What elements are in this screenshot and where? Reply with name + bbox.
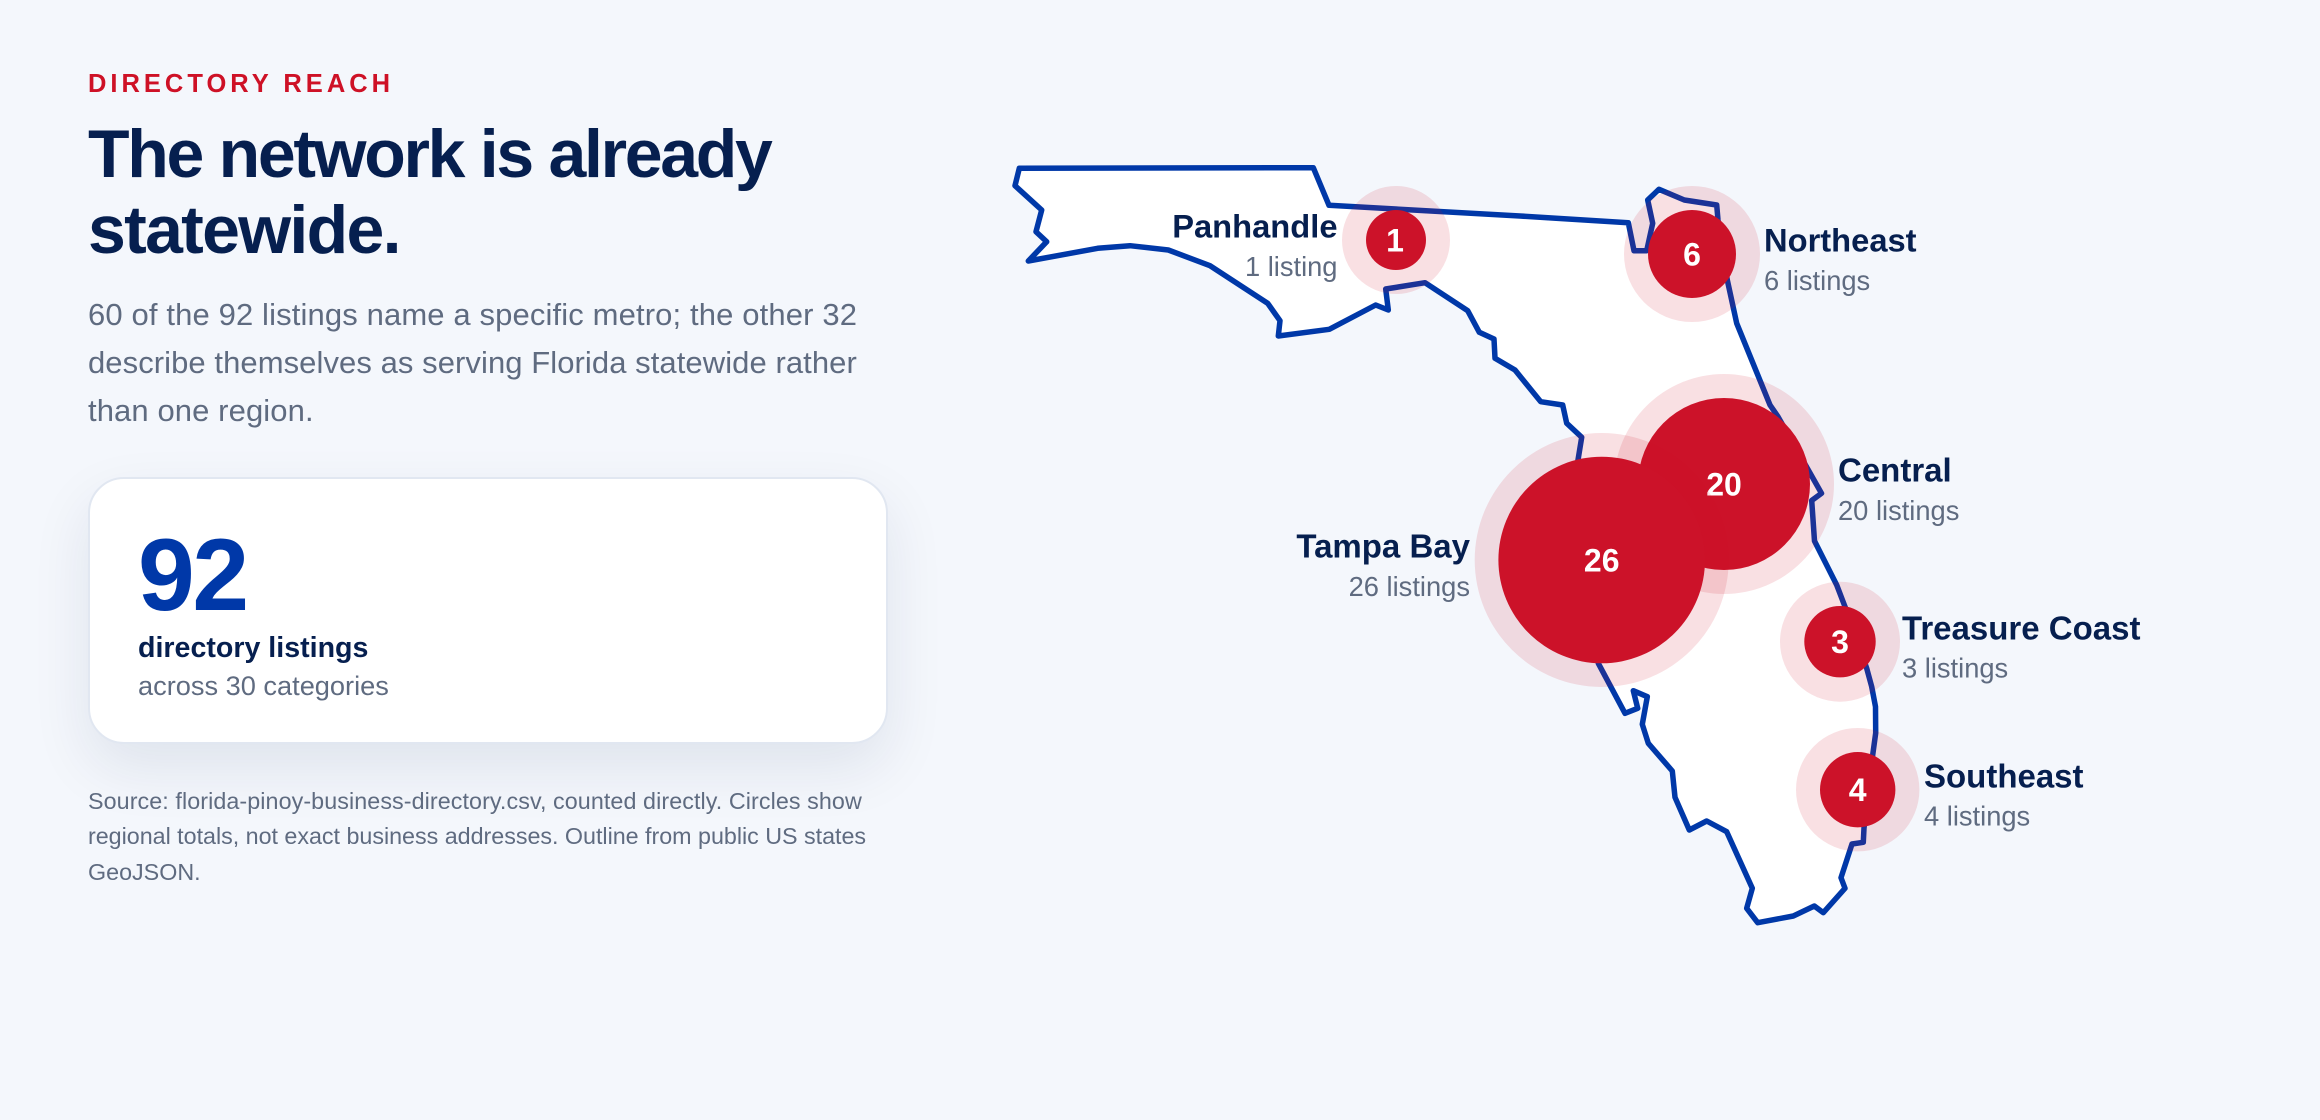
source note: regional totals, not exact business addresses. Outline from public US states — [88, 823, 866, 849]
bubble: Tampa Bay: 26 — [1584, 542, 1619, 578]
source note — [88, 788, 866, 885]
stat label: directory listings — [138, 632, 368, 664]
bubble: Treasure Coast: 3 listings — [1902, 653, 2008, 684]
bubble: Tampa Bay: 26 listings — [1349, 571, 1470, 602]
title: The network is already — [88, 116, 771, 192]
panel: total listings card — [88, 477, 888, 744]
bubble: Southeast: 4 listings — [1924, 801, 2030, 832]
bubble: Treasure Coast — [1780, 582, 2140, 702]
intro paragraph — [88, 296, 857, 428]
title: statewide. — [88, 192, 400, 268]
bubble: Northeast: 6 listings — [1764, 265, 1870, 296]
stat sublabel: across 30 categories — [138, 670, 389, 700]
source note: Source: florida-pinoy-business-directory.csv, counted directly. Circles show — [88, 788, 862, 814]
bubble: Southeast: 4 — [1849, 772, 1867, 808]
bubble: Panhandle: 1 listing — [1245, 251, 1338, 282]
bubble: Tampa Bay — [1296, 433, 1729, 687]
bubble: Panhandle: Panhandle — [1172, 208, 1338, 245]
intro paragraph: 60 of the 92 listings name a specific metro; the other 32 — [88, 296, 857, 332]
bubble: Central: Central — [1838, 452, 1952, 489]
bubble: Central: 20 listings — [1838, 495, 1959, 526]
source note: GeoJSON. — [88, 859, 201, 885]
bubble: Panhandle — [1172, 186, 1450, 294]
intro paragraph: than one region. — [88, 392, 314, 428]
bubble: Treasure Coast: 3 — [1831, 624, 1849, 660]
bubble: Northeast — [1624, 186, 1917, 322]
bubble: Southeast: Southeast — [1924, 757, 2084, 794]
bubble: Central — [1614, 374, 1959, 594]
bubble: Panhandle: 1 — [1386, 222, 1404, 258]
bubble: Treasure Coast: Treasure Coast — [1902, 609, 2140, 646]
bubble: Tampa Bay: Tampa Bay — [1296, 528, 1471, 565]
stat number: 92 — [138, 518, 247, 632]
bubble: Northeast: 6 — [1683, 236, 1701, 272]
bubble: Northeast: Northeast — [1764, 222, 1917, 259]
eyebrow: directory reach: DIRECTORY REACH — [88, 70, 394, 98]
intro paragraph: describe themselves as serving Florida statewide rather — [88, 344, 857, 380]
Florida outline — [1015, 168, 1876, 923]
title — [88, 116, 772, 268]
bubble: Southeast — [1796, 728, 2084, 851]
bubble: Central: 20 — [1706, 466, 1742, 502]
